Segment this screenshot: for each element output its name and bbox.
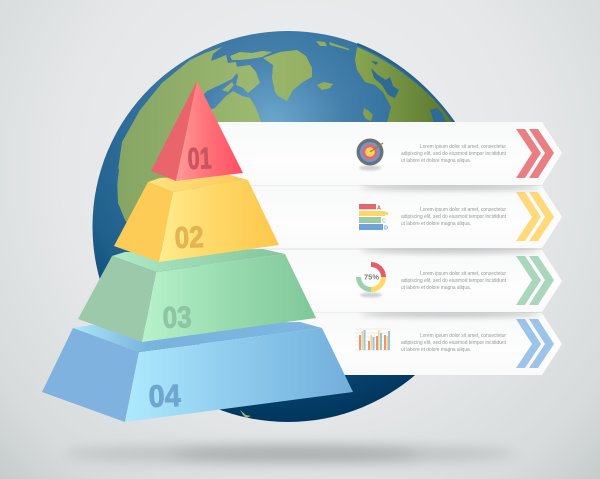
icon: labelled bars [359, 204, 388, 232]
icon: labelled bars: D [384, 226, 388, 232]
globe [92, 31, 484, 422]
panel: banner 3 [200, 250, 562, 318]
text block 4: ut labore et dolore magna aliqua. [401, 347, 471, 353]
pyramid tier 04 [42, 322, 353, 422]
icon: donut 75% [356, 262, 386, 298]
text block 4: Lorem ipsum dolor sit amet, consectetur [420, 333, 506, 339]
text block 2: Lorem ipsum dolor sit amet, consectetur [420, 207, 506, 213]
right continent inlets [115, 61, 446, 187]
icon: labelled bars: C [382, 218, 386, 224]
arrow: red chevrons [516, 129, 554, 178]
icon: target [356, 138, 384, 170]
icon: labelled bars: A [377, 206, 381, 212]
text block 2: ut labore et dolore magna aliqua. [401, 221, 471, 227]
text block 3: ut labore et dolore magna aliqua. [401, 285, 471, 291]
panel: banner 4 [200, 313, 562, 375]
arrow: blue chevrons [516, 319, 554, 368]
text block 3: adipiscing elit, sed do eiusmod tempor incididunt [401, 278, 506, 284]
text block 1: ut labore et dolore magna aliqua. [401, 158, 471, 164]
icon: bar chart [355, 329, 391, 350]
text block 1 [401, 144, 506, 164]
number 02: 02 [174, 221, 204, 255]
arrow: yellow chevrons [516, 192, 554, 241]
text block 1: adipiscing elit, sed do eiusmod tempor incididunt [401, 151, 506, 157]
ground shadow [64, 444, 516, 464]
icon: donut 75%: 75% [364, 272, 379, 282]
arrow: green chevrons [516, 256, 554, 305]
text block 2: adipiscing elit, sed do eiusmod tempor incididunt [401, 214, 506, 220]
pyramid tier 02 [114, 175, 279, 262]
panel: banner 1 [200, 122, 562, 190]
number 04: 04 [148, 378, 182, 414]
text block 1: Lorem ipsum dolor sit amet, consectetur [420, 144, 506, 150]
pyramid tier 01 [151, 81, 243, 181]
text block 4: adipiscing elit, sed do eiusmod tempor incididunt [401, 340, 506, 346]
number 01: 01 [187, 142, 212, 176]
panel: banner 2 [200, 186, 562, 254]
number 03: 03 [162, 301, 192, 335]
text block 4 [401, 333, 506, 353]
pyramid tier 03 [78, 249, 316, 342]
text block 2 [401, 207, 506, 227]
text block 3 [401, 271, 506, 291]
continents [117, 41, 455, 418]
banner backing [200, 124, 520, 374]
globe limb [357, 44, 455, 124]
text block 3: Lorem ipsum dolor sit amet, consectetur [420, 271, 506, 277]
